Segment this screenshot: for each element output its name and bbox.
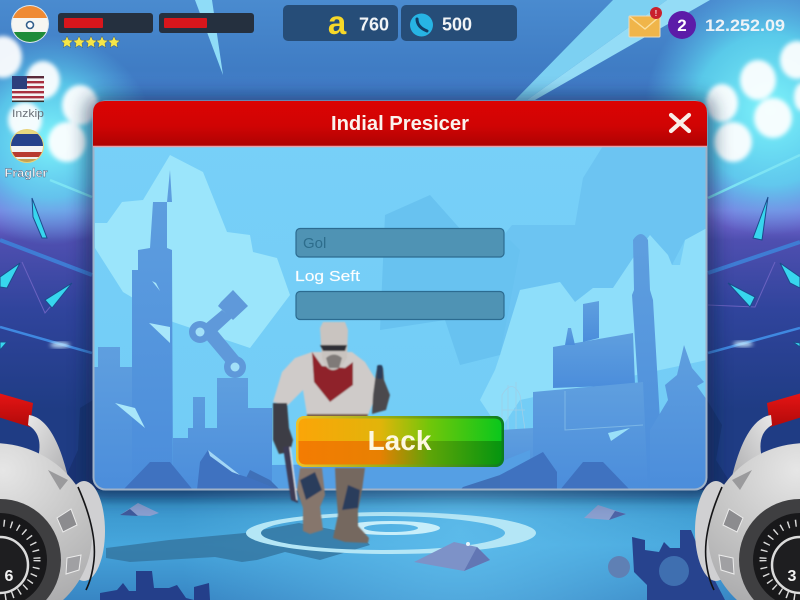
- icon: mail: [629, 7, 662, 37]
- skyline silhouette right: [632, 530, 725, 600]
- icon: US flag: [12, 76, 44, 102]
- pale clouds: [95, 155, 290, 348]
- icon: mail: !: [655, 9, 657, 18]
- input label: Log Seft: [295, 268, 361, 285]
- sword: [283, 446, 298, 503]
- wire tower: [502, 382, 525, 430]
- front leg: [333, 468, 369, 543]
- level badge: 2: [677, 16, 687, 35]
- input field 1: [296, 228, 504, 257]
- stadium lights right: [706, 41, 800, 162]
- language label 2: Fragler: [4, 166, 48, 180]
- input field 1: Gol: [303, 235, 326, 252]
- rock right: [584, 505, 626, 520]
- ground shadow: [106, 523, 370, 562]
- rock centre: [414, 542, 490, 571]
- level badge: [668, 11, 696, 39]
- robot arm: [189, 290, 248, 378]
- raised hand with device: [372, 366, 390, 414]
- currency box: coins: [283, 4, 398, 41]
- currency box: calls: 500: [442, 14, 472, 34]
- currency box: calls: [401, 5, 517, 41]
- combination lock left: [0, 392, 105, 600]
- centre ground: [272, 456, 530, 488]
- skyline silhouette left: [100, 571, 210, 600]
- clock: 12.252.09: [705, 16, 785, 35]
- gauntlet arm: [273, 403, 293, 454]
- action button: [296, 416, 504, 467]
- health bar 2: [159, 13, 254, 33]
- star rating: [61, 36, 120, 48]
- header bar: [93, 101, 707, 146]
- language label 1: Inzkip: [12, 108, 44, 120]
- right skyline: [500, 234, 707, 490]
- back leg: [297, 468, 325, 534]
- target rings: [246, 512, 536, 554]
- dialog panel: [93, 101, 707, 490]
- currency box: coins: a: [328, 4, 347, 41]
- input field 2: [296, 292, 504, 320]
- mountains: [123, 450, 630, 490]
- combination lock right: [695, 392, 800, 600]
- combination lock right: 3: [788, 568, 797, 585]
- panel shadow: [86, 96, 714, 498]
- character: [273, 322, 390, 543]
- arena floor: [0, 400, 800, 600]
- left skyline: [93, 170, 272, 490]
- combination lock left: 6: [5, 568, 14, 585]
- scarf: [312, 352, 353, 402]
- icon: India flag: [11, 5, 49, 44]
- close button: [671, 115, 689, 131]
- title: Indial Presicer: [331, 113, 469, 135]
- head: [320, 322, 348, 370]
- panel scenery: [93, 146, 707, 490]
- currency box: coins: 760: [359, 14, 389, 34]
- stadium lights left: [0, 36, 98, 162]
- torso: [273, 352, 376, 415]
- rock left: [120, 503, 159, 516]
- side crystals: [0, 197, 800, 350]
- health bar 1: [58, 13, 153, 33]
- action button: Lack: [368, 425, 432, 456]
- glass shards: [115, 281, 170, 428]
- icon: striped flag: [10, 129, 44, 163]
